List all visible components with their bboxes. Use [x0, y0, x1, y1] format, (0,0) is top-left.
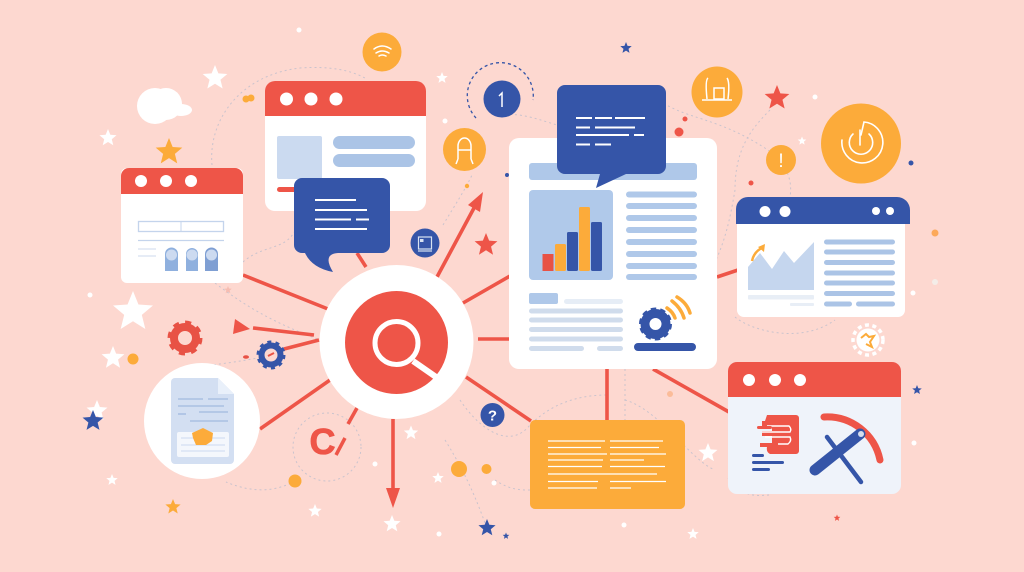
area chart: [748, 242, 814, 306]
connector rays from search hub: [243, 208, 738, 490]
bar chart: [529, 190, 613, 280]
window: top browser card: [265, 81, 426, 211]
icon: orange arch badge: [443, 128, 486, 171]
icon: red document with speed lines: [752, 415, 799, 471]
icon: small orange and white gear: [853, 325, 883, 355]
icon: orange alert badge: !: [778, 151, 784, 172]
icon: blue numbered badge: [467, 63, 533, 118]
icon: red gear: [170, 322, 200, 354]
main report document: [509, 138, 717, 369]
icon: blue gear: [243, 342, 284, 368]
icon: code symbol: C: [310, 421, 336, 462]
speech bubble: left: [294, 178, 390, 272]
search hub: [320, 265, 474, 419]
icon: small blue screen badge: [410, 228, 440, 258]
document circle: [144, 363, 260, 479]
arrowhead: upper right: [468, 192, 483, 212]
scattered dots: [88, 28, 938, 536]
icon: orange power badge: [821, 104, 901, 184]
speech bubble: top over report: [557, 85, 666, 188]
window: bottom tools card: [728, 362, 901, 494]
icon: orange chart badge: [692, 66, 742, 118]
icon: badge: [192, 428, 213, 445]
scattered stars: [83, 42, 922, 539]
window: left browser card: [121, 168, 243, 283]
icon: wifi badge: [362, 32, 402, 72]
icon: gauge arc and crossed tools: [815, 417, 880, 482]
icon: question badge: [480, 403, 504, 427]
orange text panel: [530, 420, 685, 509]
icon: question badge: ?: [488, 408, 497, 424]
icon: white cloud: [137, 88, 192, 124]
icon: orange alert badge: [766, 145, 796, 175]
arrowhead: left: [233, 319, 250, 334]
icon: gear with signal: [634, 297, 696, 351]
window: right chart card: [736, 197, 910, 317]
arrowhead: downward: [386, 488, 400, 508]
